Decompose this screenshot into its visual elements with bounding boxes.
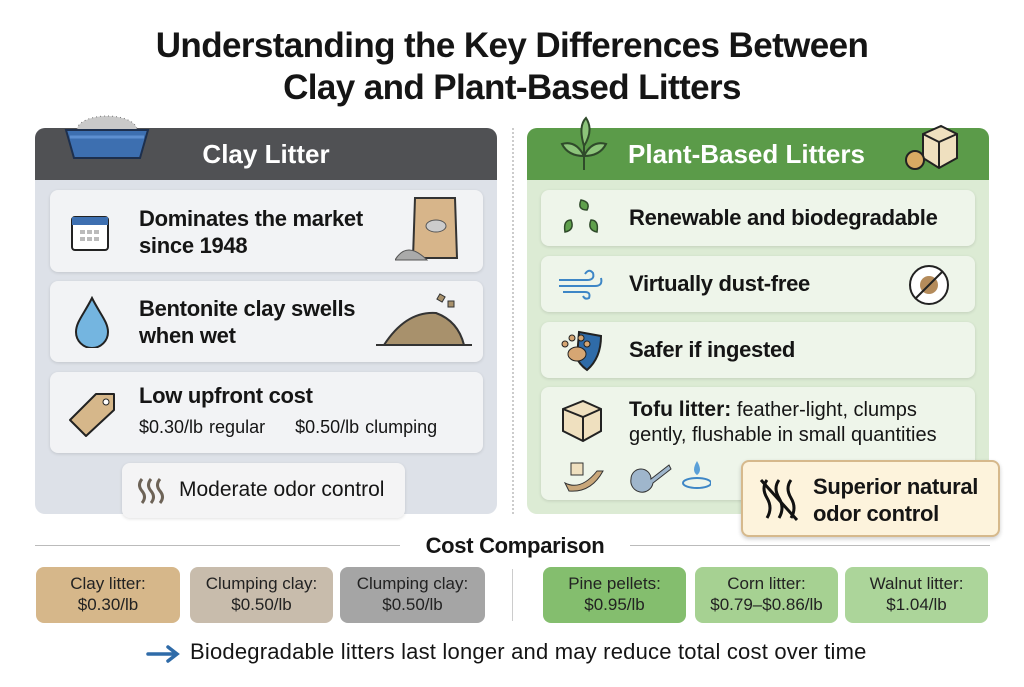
cost: walnut litter (845, 567, 988, 623)
divider (512, 128, 514, 514)
text: tofu litter (629, 398, 937, 446)
icon: litter box (64, 116, 150, 159)
icon: tofu cube header (905, 124, 958, 170)
cost: pine pellets: $0.95/lb (584, 595, 645, 614)
icon: water drop (75, 296, 109, 348)
card: cost (50, 372, 483, 453)
header: clay litter: Clay Litter (202, 139, 330, 169)
cost: clay litter (36, 567, 180, 623)
icon: wind (559, 270, 602, 300)
cost: corn litter: Corn litter: (727, 574, 806, 593)
text: safer: Safer if ingested (629, 337, 795, 362)
callout: superior odor control (741, 460, 1000, 537)
icons: tofu uses (564, 461, 711, 493)
panel: plant-based (527, 128, 989, 514)
text: bentonite: Bentonite clay swells (139, 296, 355, 321)
pill: moderate odor: Moderate odor control (179, 478, 384, 501)
card: cost: $0.30/lb regular $0.50/lb clumping (139, 417, 437, 437)
cost: walnut litter: $1.04/lb (886, 595, 947, 614)
card: safer (541, 322, 975, 378)
icon: price tag (69, 393, 115, 437)
icon: calendar (71, 216, 109, 251)
cost: clumping clay 2: $0.50/lb (382, 595, 443, 614)
card: bentonite (50, 281, 483, 362)
callout: superior odor control: Superior natural (813, 474, 978, 499)
cost: clumping clay 2 (340, 567, 485, 623)
cost boxes (36, 567, 988, 623)
text: dominates market (139, 206, 363, 258)
card: dust-free (541, 256, 975, 312)
text: bentonite (139, 296, 355, 348)
text: renewable: Renewable and biodegradable (629, 205, 938, 230)
title: Clay and Plant-Based Litters (283, 68, 741, 107)
icon: clay pile (376, 293, 472, 346)
icon: no odor (760, 479, 798, 521)
footer note: Biodegradable litters last longer and may reduce total cost over time (190, 639, 867, 664)
text: bentonite: when wet (139, 323, 236, 348)
callout: superior odor control: odor control (813, 501, 939, 526)
cost: corn litter: $0.79–$0.86/lb (710, 595, 823, 614)
icon: tofu cube (562, 400, 602, 442)
cost: clay litter: $0.30/lb (78, 595, 138, 614)
icon: no dust (909, 265, 949, 305)
card: market (50, 190, 483, 272)
cost: corn litter (695, 567, 838, 623)
text: tofu litter: Tofu litter: feather-light, clumps (629, 398, 917, 421)
panel: clay litter (35, 128, 497, 514)
icon: litter bag (395, 197, 458, 260)
cost: clay litter: Clay litter: (70, 574, 146, 593)
cost: clumping clay: Clumping clay: (206, 574, 317, 593)
pill: moderate odor (122, 463, 405, 518)
card: tofu (541, 387, 975, 500)
cost: clumping clay 2: Clumping clay: (357, 574, 468, 593)
icon: leaves (560, 116, 608, 170)
card: renewable (541, 190, 975, 246)
icon: recycle leaves (564, 199, 598, 233)
text: low upfront cost: Low upfront cost (139, 383, 313, 408)
title: Understanding the Key Differences Between (156, 26, 868, 65)
icon: arrow (146, 645, 180, 663)
text: tofu litter: gently, flushable in small quantities (629, 424, 937, 446)
text: dominates market: Dominates the market (139, 206, 363, 231)
icon: odor waves (138, 478, 164, 504)
title (156, 26, 868, 107)
cost: clumping clay: $0.50/lb (231, 595, 292, 614)
cost: walnut litter: Walnut litter: (870, 574, 963, 593)
cost: clumping clay (190, 567, 333, 623)
cost: pine pellets: Pine pellets: (568, 574, 661, 593)
header: clay litter (35, 128, 497, 180)
header: plant-based: Plant-Based Litters (628, 139, 865, 169)
text: dust-free: Virtually dust-free (629, 271, 810, 296)
heading: cost comparison: Cost Comparison (426, 533, 604, 558)
icon: paw shield (562, 330, 602, 372)
cost: pine pellets (543, 567, 686, 623)
text: dominates market: since 1948 (139, 233, 247, 258)
header: plant-based (527, 128, 989, 180)
